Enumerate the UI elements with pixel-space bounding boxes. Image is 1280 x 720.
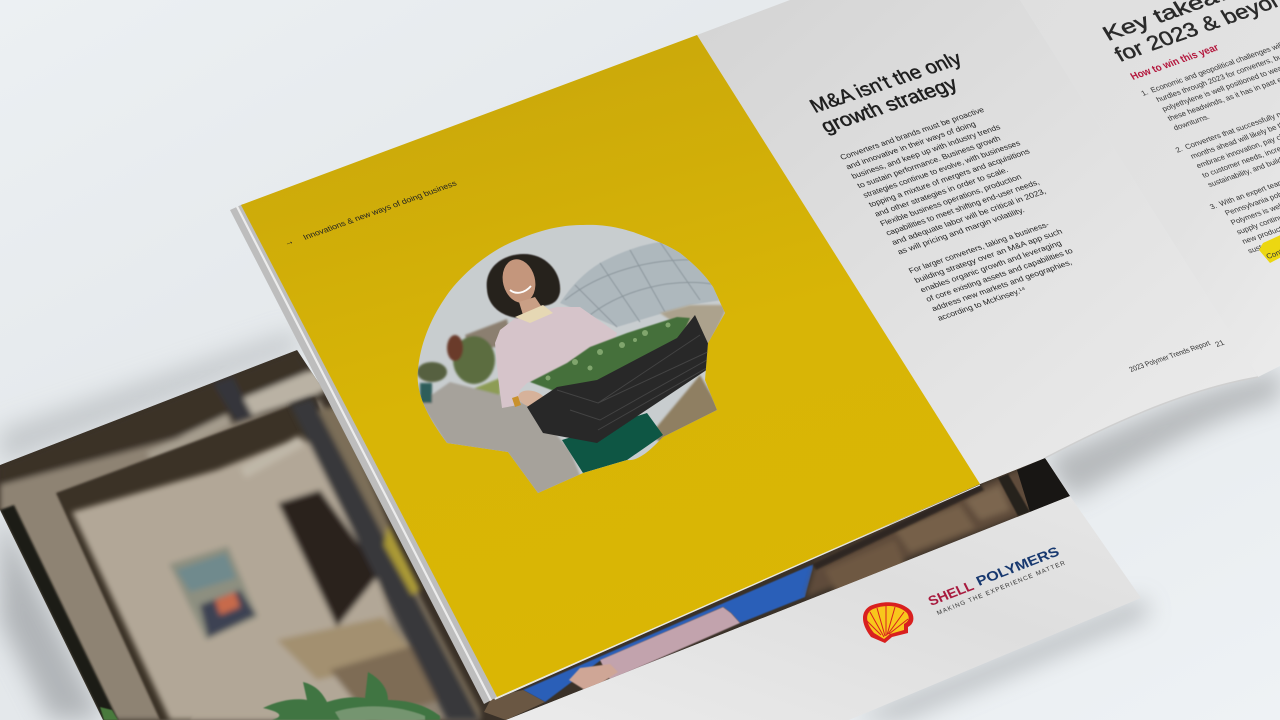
- crate of seedlings: [527, 315, 717, 443]
- numbered list: 3.: [1208, 201, 1219, 211]
- heading: growth strategy: [817, 74, 962, 137]
- sweater: [495, 307, 617, 408]
- background trees and road: [417, 305, 728, 500]
- body text: and adequate labor will be critical in 2023,: [890, 187, 1048, 247]
- body text: [838, 100, 1100, 323]
- page footer: 2023 Polymer Trends Report: [1127, 339, 1213, 374]
- background windows: [806, 458, 1070, 597]
- right page: [697, 0, 1258, 484]
- numbered list: 2.: [1174, 145, 1184, 154]
- body text: address new markets and geographies,: [930, 258, 1074, 313]
- body text: enables organic growth and leveraging: [918, 239, 1063, 294]
- body text: building strategy over an M&A app such: [913, 227, 1064, 285]
- body text: to sustain performance. Business growth: [856, 134, 1002, 190]
- face: [502, 259, 536, 302]
- trousers: [562, 413, 663, 473]
- section label: →: [282, 236, 295, 248]
- next page heading: [1099, 0, 1280, 263]
- greenhouse: [560, 242, 722, 327]
- tagline: MAKING THE EXPERIENCE MATTER: [936, 560, 1067, 617]
- spine: [230, 204, 497, 704]
- hand: [518, 390, 543, 406]
- plant: [100, 672, 440, 720]
- numbered list: downturns.: [1172, 112, 1211, 132]
- section label: Innovations & new ways of doing business: [301, 179, 458, 242]
- body text: according to McKinsey.¹⁴: [936, 285, 1028, 323]
- body text: of core existing assets and capabilities to: [924, 246, 1075, 304]
- numbered list: [1139, 38, 1280, 259]
- shell-shaped photo cutout: [410, 220, 730, 500]
- back booklet with interior photo: [0, 350, 1141, 720]
- contact button: [1259, 233, 1280, 263]
- brand name: SHELL: [926, 578, 976, 609]
- interior photo: [0, 350, 1070, 720]
- yellow left page: [241, 35, 980, 698]
- heading: M&A isn't the only: [806, 49, 966, 117]
- collar: [515, 305, 553, 323]
- white cover band with logo: POLYMERS: [974, 544, 1062, 589]
- person: [487, 254, 663, 473]
- blue shirt figure: [484, 564, 814, 720]
- body text: For larger converters, taking a business-: [907, 220, 1051, 275]
- body text: and other strategies in order to scale.: [873, 166, 1010, 218]
- body text: strategies continue to evolve, with businesses: [861, 139, 1022, 200]
- body text: as will pricing and margin volatility.: [896, 206, 1026, 256]
- body text: Converters and brands must be proactive: [838, 105, 986, 162]
- body text: business, and keep up with industry trends: [850, 123, 1002, 181]
- body text: topping a mixture of mergers and acquisitions: [867, 147, 1032, 209]
- body text: Flexible business operations, production: [878, 173, 1023, 228]
- icon: shell logo: [863, 602, 913, 643]
- red subheading: How to win this year: [1128, 42, 1221, 83]
- white cover band with logo: [506, 496, 1141, 720]
- page footer: 21: [1213, 338, 1226, 349]
- body text: capabilities to meet shifting end-user needs,: [884, 178, 1041, 237]
- numbered list: 1.: [1139, 88, 1150, 98]
- body text: and innovative in their ways of doing: [844, 120, 978, 171]
- hair: [487, 254, 560, 318]
- right side next page: [1020, 0, 1280, 377]
- neck: [519, 297, 541, 315]
